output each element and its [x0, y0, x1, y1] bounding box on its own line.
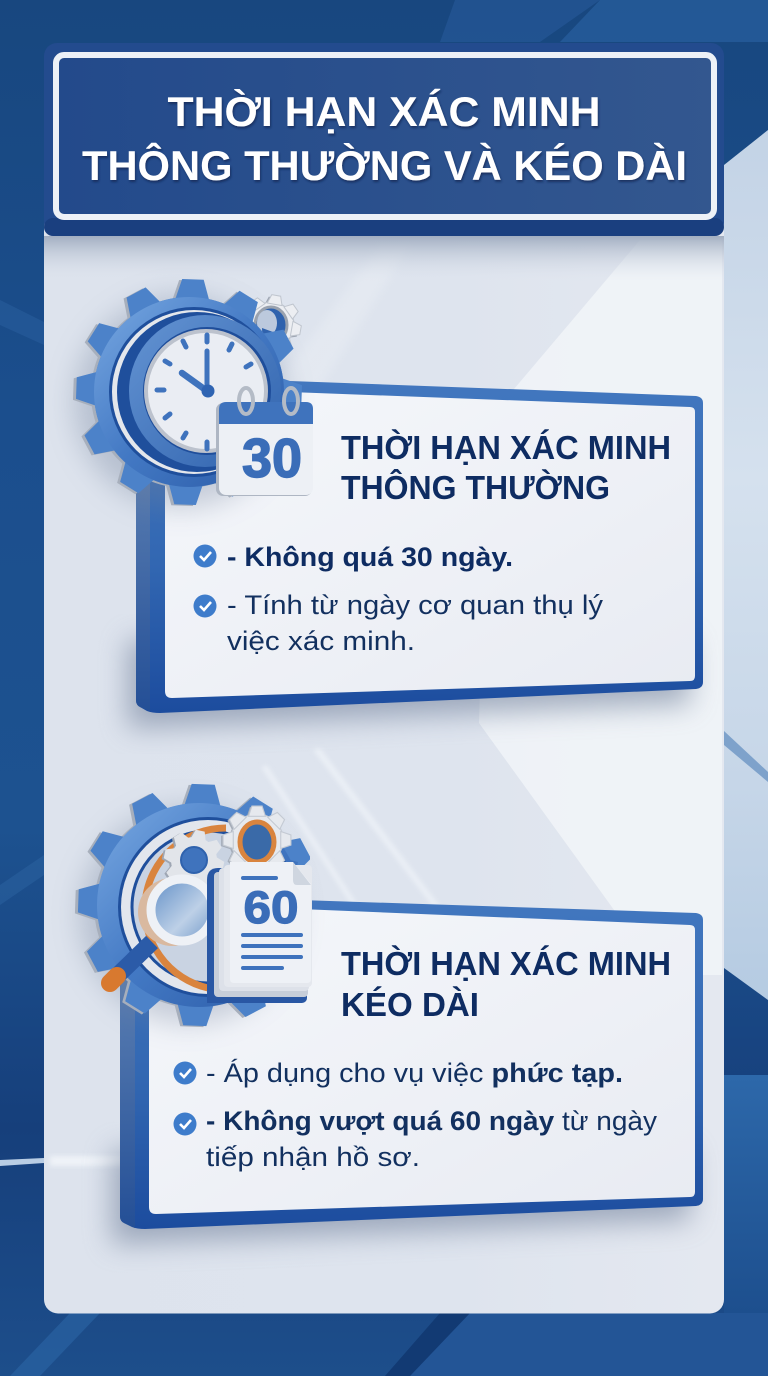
large blue gear — [69, 275, 306, 510]
title text: THỜI HẠN XÁC MINH — [168, 87, 600, 135]
card heading: THỜI HẠN XÁC MINH — [341, 945, 671, 982]
panel: extended verification period — [112, 900, 703, 1244]
icon: gear, magnifier and document 60 — [71, 780, 324, 1031]
checklist item: counted from acceptance date — [194, 590, 604, 656]
card heading: THÔNG THƯỜNG — [341, 468, 610, 506]
title text: THÔNG THƯỜNG VÀ KÉO DÀI — [82, 141, 687, 189]
card heading: KÉO DÀI — [341, 986, 479, 1023]
checklist item: up to 60 days: tiếp nhận hồ sơ. — [206, 1142, 420, 1172]
calendar 30: 30 — [242, 427, 302, 489]
document 60 — [207, 862, 312, 1003]
small silver gear — [233, 290, 306, 372]
checklist item: up to 60 days: - Không vượt quá 60 ngày từ ngày — [206, 1106, 658, 1136]
checklist item: counted from acceptance date: việc xác minh. — [227, 626, 415, 656]
magnifier — [110, 878, 213, 983]
main light panel — [44, 200, 724, 1314]
title text — [82, 87, 687, 189]
title banner — [44, 43, 724, 236]
card heading — [341, 945, 671, 1023]
panel: normal verification period — [128, 381, 703, 728]
checklist item: up to 60 days — [174, 1106, 658, 1172]
card heading: THỜI HẠN XÁC MINH — [341, 429, 671, 466]
inner silver gears — [156, 806, 298, 897]
document 60: 60 — [244, 882, 298, 933]
calendar 30 — [216, 388, 313, 496]
clock face — [146, 331, 266, 451]
checklist item: complex cases: - Áp dụng cho vụ việc phức tạp. — [206, 1058, 623, 1088]
checklist item: counted from acceptance date: - Tính từ ngày cơ quan thụ lý — [227, 590, 604, 620]
checklist item: up to 30 days: - Không quá 30 ngày. — [227, 542, 513, 572]
icon: gear, clock and calendar 30 — [69, 275, 313, 510]
large blue gear — [71, 780, 324, 1031]
card heading — [341, 429, 671, 506]
